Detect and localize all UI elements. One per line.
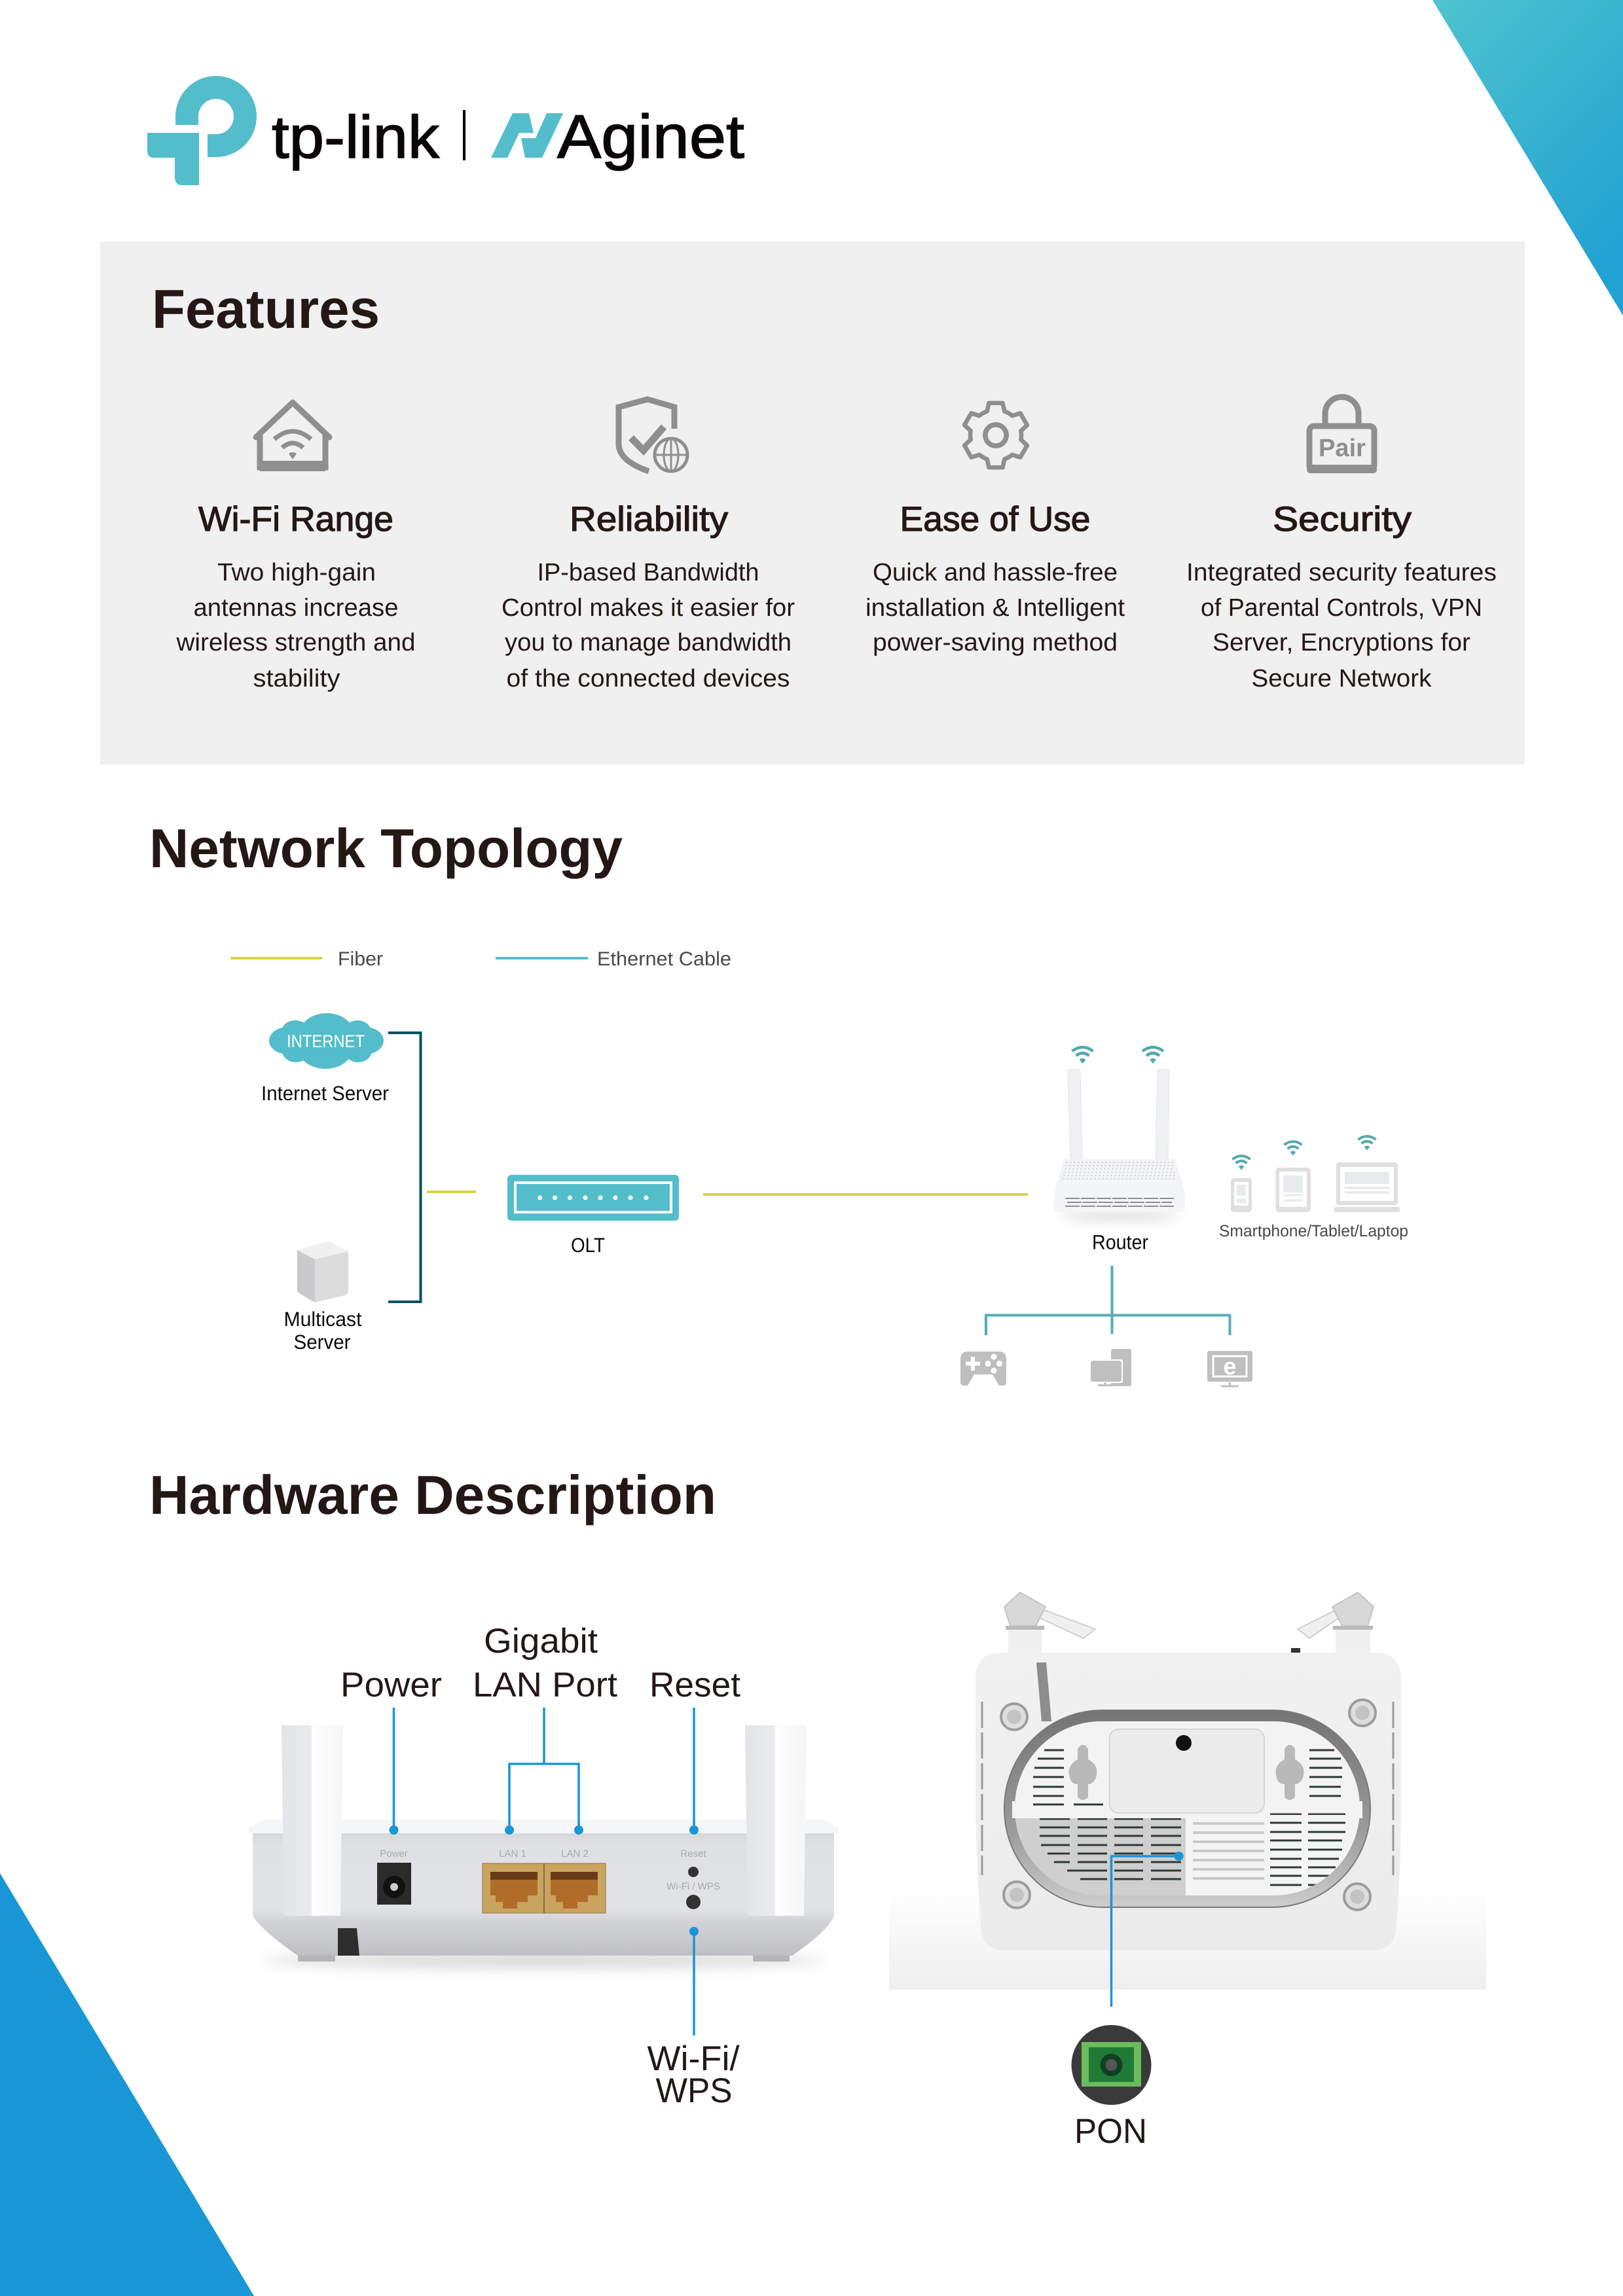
legend: ethernet cable: Ethernet Cable — [597, 948, 731, 970]
lower plate light slots — [1193, 1823, 1264, 1878]
description: installation & Intelligent — [866, 594, 1125, 622]
description: stability — [253, 665, 340, 692]
label: Multicast Server — [284, 1308, 362, 1354]
keyhole right — [1275, 1745, 1304, 1800]
right antenna — [745, 1725, 807, 1916]
heading: Features: Features — [152, 278, 380, 340]
Aginet wordmark: Aginet — [557, 102, 744, 171]
heading: Wi-Fi Range — [198, 500, 393, 539]
description: power-saving method — [873, 629, 1118, 656]
labels: LAN Port — [473, 1666, 617, 1704]
power port — [377, 1848, 411, 1905]
icons: router wifi — [1072, 1047, 1163, 1064]
label: Internet Server: Internet Server — [261, 1082, 389, 1105]
feature: Wi-Fi Range — [175, 403, 415, 692]
icon: tablet — [1275, 1141, 1311, 1212]
description — [866, 559, 1125, 656]
label plate with hole — [1109, 1729, 1264, 1813]
antennas — [1004, 1592, 1374, 1656]
label: OLT: OLT — [571, 1234, 605, 1257]
legend: ethernet cable — [496, 948, 731, 970]
icon: smartphone — [1231, 1156, 1252, 1212]
lower right plate — [1186, 1815, 1362, 1897]
feature: Reliability — [501, 399, 795, 692]
icon: tp-link mark — [147, 76, 257, 185]
labels: Reset — [649, 1666, 740, 1704]
legend: fiber: Fiber — [338, 948, 383, 970]
labels: WPS — [656, 2072, 732, 2110]
description: of Parental Controls, VPN — [1201, 594, 1482, 622]
power port: Power — [380, 1848, 408, 1859]
description — [1186, 559, 1497, 692]
labels — [340, 1622, 740, 2110]
icon: padlock with Pair label: Pair — [1319, 435, 1366, 462]
description: Control makes it easier for — [501, 594, 795, 622]
top lid cut — [1036, 1662, 1051, 1721]
LAN ports: LAN 1 — [499, 1848, 526, 1859]
icon: IPTV monitor: e — [1223, 1353, 1237, 1380]
icon: game controller — [960, 1352, 1006, 1386]
legend: fiber — [230, 948, 383, 970]
icon: desktop PC — [1089, 1349, 1131, 1386]
panel: features — [100, 242, 1525, 764]
lower left vents — [1040, 1819, 1181, 1879]
labels: Wi-Fi/ — [647, 2039, 740, 2078]
tp-link wordmark: tp-link — [272, 104, 440, 171]
icon: OLT — [507, 1175, 679, 1221]
router body — [976, 1653, 1401, 1950]
plate side tabs — [1012, 1801, 1362, 1818]
lower right vents — [1270, 1814, 1345, 1885]
side vents — [982, 1702, 1393, 1875]
hardware: rear view — [249, 1622, 839, 2110]
logo: tp-link | Aginet — [147, 76, 744, 185]
heading: Hardware Description: Hardware Description — [149, 1464, 716, 1526]
icon: internet cloud: INTERNET — [287, 1031, 365, 1051]
keyhole left — [1068, 1745, 1097, 1800]
heading: Security — [1273, 500, 1412, 539]
labels: Gigabit — [484, 1622, 598, 1660]
connector: ethernet tree — [986, 1266, 1230, 1335]
description: IP-based Bandwidth — [537, 559, 759, 586]
logo divider — [463, 110, 465, 160]
label: Router: Router — [1092, 1230, 1148, 1254]
floor backdrop — [889, 1885, 1486, 1990]
description: Two high-gain — [217, 559, 376, 586]
icon: PON port — [1071, 2025, 1151, 2105]
icon: IPTV monitor — [1207, 1351, 1252, 1386]
label: PON: PON — [1074, 2112, 1147, 2151]
hardware: bottom view — [889, 1592, 1486, 2151]
router rear body — [249, 1820, 839, 1962]
description: you to manage bandwidth — [505, 629, 792, 656]
description: antennas increase — [194, 594, 398, 622]
label: Multicast Server: Server — [293, 1331, 351, 1354]
description: Integrated security features — [1186, 559, 1497, 586]
heading: Network Topology: Network Topology — [149, 817, 623, 879]
heading: Ease of Use — [900, 500, 1091, 539]
description: wireless strength and — [175, 629, 415, 656]
router rear shadow — [262, 1956, 825, 1965]
vents and mounting plates — [1012, 1721, 1362, 1897]
PON callout line — [1112, 1856, 1178, 2007]
left antenna — [282, 1725, 343, 1916]
icon: laptop — [1334, 1136, 1400, 1212]
icon: home wifi — [256, 403, 329, 467]
description: Quick and hassle-free — [873, 559, 1118, 586]
upper vents — [1033, 1750, 1342, 1804]
icon: multicast server — [297, 1241, 348, 1302]
reset and wps buttons: Reset — [680, 1848, 706, 1859]
reset and wps buttons: Wi-Fi / WPS — [666, 1881, 720, 1892]
description — [501, 559, 795, 692]
icon: Aginet N — [491, 113, 563, 158]
feature: Ease of Use — [866, 403, 1125, 656]
labels: Power — [340, 1666, 442, 1704]
bottom recess — [1004, 1710, 1370, 1907]
description: Server, Encryptions for — [1213, 629, 1470, 656]
icon: internet cloud — [269, 1013, 384, 1069]
connector: fiber to router — [703, 1193, 1028, 1196]
LAN ports: LAN 2 — [561, 1848, 589, 1859]
PON callout dot — [1175, 1852, 1184, 1861]
callout dots — [389, 1825, 699, 1936]
description: of the connected devices — [507, 665, 790, 692]
connector: servers bracket — [388, 1033, 420, 1302]
icon: gear — [964, 403, 1027, 467]
icon: shield with check and globe — [619, 399, 687, 471]
callout lines — [394, 1708, 694, 2036]
screw posts — [1001, 1700, 1376, 1910]
description: Secure Network — [1252, 665, 1432, 692]
connector: fiber to OLT — [427, 1191, 476, 1193]
reset and wps buttons — [666, 1848, 720, 1909]
decorative corner: bottom left — [0, 1873, 254, 2296]
heading: Reliability — [570, 500, 729, 539]
feature: Security — [1186, 397, 1497, 692]
upper plate — [1012, 1721, 1362, 1815]
decorative corner: top right — [1432, 0, 1623, 315]
icon: padlock with Pair label — [1307, 397, 1377, 473]
label: Multicast Server: Multicast — [284, 1308, 362, 1331]
description — [175, 559, 415, 692]
label: devices: Smartphone/Tablet/Laptop — [1219, 1222, 1408, 1240]
LAN ports — [483, 1848, 606, 1913]
icon: router — [1054, 1069, 1185, 1219]
diagram: network topology — [230, 948, 1408, 1386]
